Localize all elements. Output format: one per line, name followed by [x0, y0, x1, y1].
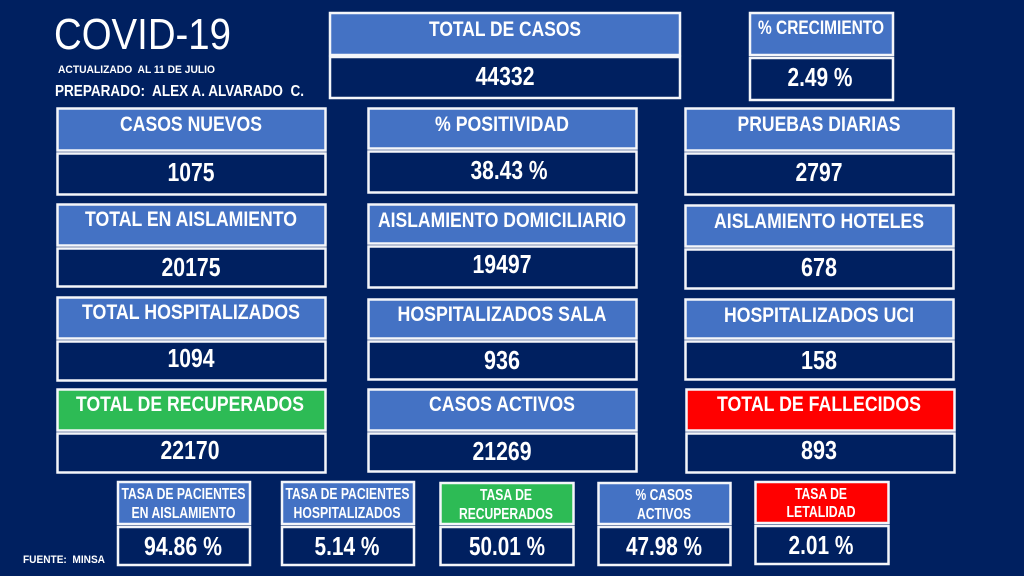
card: total en aislamiento — [58, 204, 326, 286]
card: tasa aislamiento: EN AISLAMIENTO — [132, 505, 236, 522]
card: pruebas diarias — [686, 108, 954, 194]
card: aislamiento domiciliario: AISLAMIENTO DOMICILIARIO — [378, 209, 626, 232]
card: casos activos: 21269 — [472, 436, 532, 466]
card: tasa hospitalizados — [282, 482, 414, 565]
card: total de fallecidos: 893 — [801, 435, 837, 465]
card: aislamiento domiciliario — [368, 204, 636, 288]
card: aislamiento hoteles — [686, 206, 954, 288]
card: positividad — [368, 108, 636, 192]
card: total de recuperados — [58, 390, 326, 472]
card: crecimiento: % CRECIMIENTO — [758, 18, 884, 39]
source: FUENTE: MINSA — [23, 554, 105, 566]
card: casos nuevos: 1075 — [168, 157, 214, 187]
card: crecimiento: 2.49 % — [788, 62, 852, 92]
card: tasa hospitalizados: HOSPITALIZADOS — [294, 505, 401, 522]
card: total de casos: 44332 — [476, 61, 534, 91]
card: total hospitalizados: TOTAL HOSPITALIZADOS — [82, 301, 300, 324]
card: positividad: % POSITIVIDAD — [435, 113, 569, 136]
card: total de casos: TOTAL DE CASOS — [429, 18, 581, 41]
card: total de fallecidos: TOTAL DE FALLECIDOS — [717, 393, 921, 416]
card: tasa recuperados: RECUPERADOS — [459, 506, 553, 523]
card: total de recuperados: 22170 — [160, 435, 220, 465]
card: tasa recuperados: TASA DE — [480, 487, 532, 504]
author: PREPARADO: ALEX A. ALVARADO C. — [55, 83, 304, 100]
card: casos activos pct: 47.98 % — [626, 531, 702, 561]
card: tasa letalidad — [756, 482, 888, 564]
card: casos activos pct: % CASOS — [636, 487, 693, 504]
card: tasa letalidad: 2.01 % — [788, 530, 854, 560]
update date: ACTUALIZADO AL 11 DE JULIO — [58, 64, 215, 76]
card: tasa recuperados — [440, 483, 574, 565]
card: total hospitalizados: 1094 — [168, 343, 215, 373]
card: aislamiento domiciliario: 19497 — [472, 249, 532, 279]
card: tasa aislamiento — [118, 482, 250, 565]
card: total de fallecidos — [686, 390, 954, 472]
card: casos nuevos — [58, 108, 326, 194]
card: hospitalizados sala — [368, 300, 636, 380]
card: hospitalizados uci: 158 — [801, 345, 837, 375]
card: total de casos — [330, 13, 680, 98]
card: casos nuevos: CASOS NUEVOS — [120, 113, 262, 136]
card: total hospitalizados — [58, 298, 326, 380]
card: hospitalizados sala: 936 — [484, 345, 520, 375]
card: tasa letalidad: LETALIDAD — [786, 504, 856, 521]
card: total en aislamiento: 20175 — [162, 252, 220, 282]
card: crecimiento — [750, 13, 893, 100]
card: casos activos: CASOS ACTIVOS — [429, 393, 575, 416]
card: total en aislamiento: TOTAL EN AISLAMIENTO — [85, 208, 297, 231]
card: pruebas diarias: PRUEBAS DIARIAS — [738, 113, 900, 136]
card: aislamiento hoteles: AISLAMIENTO HOTELES — [714, 210, 924, 233]
card: casos activos pct: ACTIVOS — [637, 506, 691, 523]
card: casos activos pct — [598, 483, 730, 565]
card: tasa hospitalizados: TASA DE PACIENTES — [286, 486, 410, 503]
card: tasa aislamiento: 94.86 % — [144, 531, 222, 561]
title: COVID-19 — [54, 10, 231, 59]
card: total de recuperados: TOTAL DE RECUPERADOS — [76, 393, 304, 416]
card: aislamiento hoteles: 678 — [801, 252, 837, 282]
card: tasa recuperados: 50.01 % — [469, 531, 545, 561]
card: hospitalizados uci — [686, 300, 954, 380]
card: tasa aislamiento: TASA DE PACIENTES — [122, 486, 246, 503]
card: tasa letalidad: TASA DE — [795, 486, 847, 503]
card: hospitalizados uci: HOSPITALIZADOS UCI — [724, 304, 914, 327]
card: hospitalizados sala: HOSPITALIZADOS SALA — [398, 303, 606, 326]
card: tasa hospitalizados: 5.14 % — [314, 531, 380, 561]
card: casos activos — [368, 390, 636, 472]
card: positividad: 38.43 % — [470, 155, 548, 185]
card: pruebas diarias: 2797 — [796, 157, 842, 187]
